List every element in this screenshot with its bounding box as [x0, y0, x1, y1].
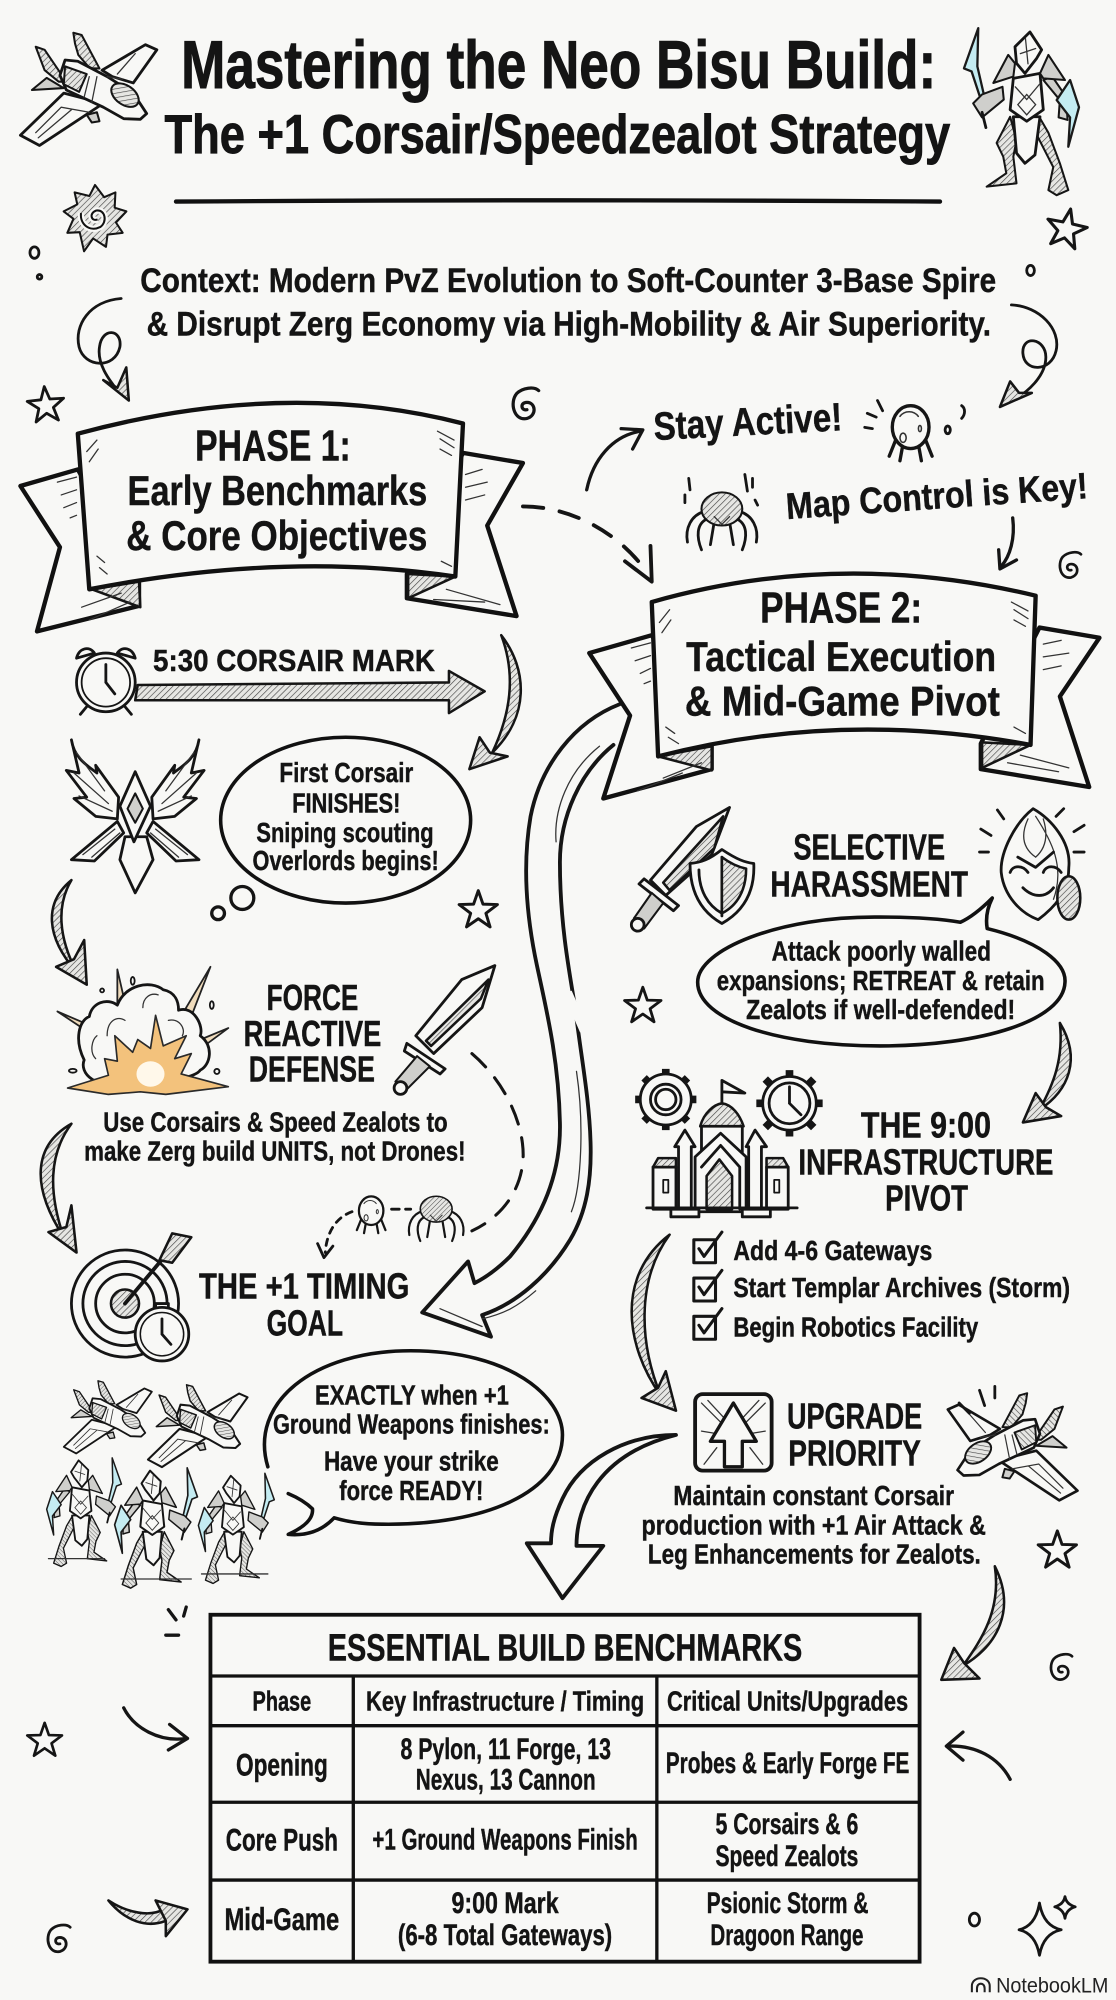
panel: phase 2 banner: PHASE 2: [760, 584, 922, 632]
table: essential build benchmarks: Key Infrastructure / Timing [366, 1685, 644, 1716]
icons: small zerg bugs [357, 1196, 463, 1241]
label: selective harassment [770, 828, 968, 905]
label: +1 timing goal: GOAL [267, 1303, 343, 1343]
icon: corsair emblem [66, 740, 204, 893]
icon: explosion [57, 967, 228, 1094]
curved arrow [41, 1124, 77, 1253]
panel: phase 1 banner: PHASE 1: [195, 422, 351, 470]
context text [140, 262, 996, 344]
checklist [694, 1232, 1070, 1343]
curved arrow [632, 1235, 676, 1411]
checklist: Add 4-6 Gateways [733, 1235, 932, 1266]
label: +1 timing goal: THE +1 TIMING [199, 1266, 409, 1306]
panel: phase 2 banner [589, 574, 1099, 798]
arrow to table: top left [124, 1708, 187, 1750]
dashed arrow [318, 1212, 352, 1258]
icon: alarm clock [77, 649, 135, 714]
dashed arrow between phases [523, 506, 652, 582]
icon: upgrade arrow box [695, 1394, 772, 1471]
icon: zealot top right [964, 28, 1079, 195]
panel: phase 2 banner: & Mid-Game Pivot [685, 678, 1000, 725]
speech bubble: strike force: Ground Weapons finishes: [273, 1409, 550, 1440]
icons: corsair squad [64, 1381, 248, 1467]
label: stay active: Stay Active! [652, 395, 843, 449]
label: force reactive defense: REACTIVE [244, 1014, 381, 1054]
speech bubble: strike force [264, 1351, 562, 1535]
icon: corsair right [948, 1386, 1077, 1500]
speech bubble: attack: Attack poorly walled [772, 935, 991, 966]
panel: phase 1 banner: Early Benchmarks [128, 467, 427, 514]
star [1043, 205, 1090, 250]
thought bubble [212, 737, 471, 920]
speech bubble: strike force: force READY! [339, 1475, 483, 1506]
curly arrow left [78, 299, 129, 401]
text block: upgrade [642, 1480, 986, 1570]
speech bubble: attack: Zealots if well-defended! [746, 994, 1015, 1025]
table: essential build benchmarks: Critical Units/Upgrades [667, 1685, 908, 1716]
label: force reactive defense: FORCE [267, 978, 358, 1018]
icon: castle with gears [635, 1069, 823, 1217]
table: essential build benchmarks: ESSENTIAL BUILD BENCHMARKS [328, 1627, 802, 1670]
thought bubble: FINISHES! [292, 788, 400, 819]
icon: spider [685, 475, 758, 550]
icon: target and stopwatch [71, 1233, 191, 1361]
table: essential build benchmarks: Probes & Early Forge FE [666, 1747, 909, 1780]
title: The +1 Corsair/Speedzealot Strategy [165, 103, 951, 165]
thought bubble: Sniping scouting [256, 817, 434, 848]
arrow to table: bottom left [108, 1900, 187, 1936]
icon: sword [394, 966, 495, 1094]
label: 9:00 pivot [798, 1106, 1054, 1218]
label: corsair mark: 5:30 CORSAIR MARK [153, 644, 435, 678]
table: essential build benchmarks: Mid-Game [224, 1901, 339, 1937]
big curved arrow from phase 2 to timing goal [422, 704, 620, 1337]
table: essential build benchmarks: Opening [236, 1746, 328, 1782]
arrow: striped [135, 671, 485, 713]
label: selective harassment: SELECTIVE [793, 828, 945, 868]
label: upgrade priority: UPGRADE [787, 1397, 922, 1437]
curved arrow [1023, 1023, 1071, 1122]
table: essential build benchmarks: Core Push [226, 1822, 338, 1858]
icon: zerg swirl [64, 185, 126, 251]
label: force reactive defense: DEFENSE [249, 1050, 375, 1090]
table: essential build benchmarks: (6-8 Total Gateways) [398, 1919, 612, 1952]
icon: smiling zealot [980, 809, 1084, 920]
label: selective harassment: HARASSMENT [770, 865, 968, 905]
curved arrow [469, 635, 521, 769]
title [165, 28, 951, 165]
decorative circle and sparkles [969, 1897, 1075, 1955]
table: essential build benchmarks: Phase [253, 1685, 311, 1716]
arrow to table: right [946, 1732, 1010, 1779]
table: essential build benchmarks: 5 Corsairs & 6 [716, 1808, 858, 1841]
thought bubble: Overlords begins! [253, 845, 439, 876]
text block: upgrade: Leg Enhancements for Zealots. [648, 1539, 981, 1570]
context text: & Disrupt Zerg Economy via High-Mobility & Air Superiority. [147, 306, 991, 344]
title: Mastering the Neo Bisu Build: [181, 28, 936, 103]
icon: sword and shield [631, 807, 754, 931]
curved arrow [52, 880, 87, 985]
table: essential build benchmarks: Speed Zealots [716, 1840, 858, 1873]
big arrow to table [527, 1435, 676, 1598]
notebooklm mark: NotebookLM [996, 1972, 1108, 1997]
speech bubble: strike force: Have your strike [324, 1446, 499, 1477]
panel: phase 1 banner [20, 403, 523, 631]
table: essential build benchmarks: 9:00 Mark [452, 1887, 559, 1920]
table: essential build benchmarks: +1 Ground Weapons Finish [372, 1823, 638, 1856]
text block: force reactive: Use Corsairs & Speed Zealots to [103, 1106, 448, 1137]
label: 9:00 pivot: PIVOT [885, 1178, 968, 1218]
arrow to phase 2 [999, 518, 1017, 569]
text block: upgrade: production with +1 Air Attack & [642, 1509, 986, 1540]
panel: phase 1 banner: & Core Objectives [126, 512, 427, 559]
decorative circles top [30, 247, 1034, 279]
label: upgrade priority [787, 1397, 922, 1474]
table: essential build benchmarks: Nexus, 13 Cannon [416, 1763, 596, 1796]
label: +1 timing goal [199, 1266, 409, 1343]
context text: Context: Modern PvZ Evolution to Soft-Counter 3-Base Spire [140, 262, 996, 300]
speech bubble: strike force: EXACTLY when +1 [315, 1379, 509, 1410]
arrow to stay active [587, 429, 643, 490]
icons: zealot squad [47, 1458, 274, 1588]
thought bubble: First Corsair [279, 757, 413, 788]
label: 9:00 pivot: THE 9:00 [861, 1106, 991, 1146]
table: essential build benchmarks: Dragoon Range [710, 1919, 863, 1952]
text block: upgrade: Maintain constant Corsair [673, 1480, 954, 1511]
speech bubble: attack [698, 898, 1065, 1046]
table: essential build benchmarks: Psionic Storm & [707, 1887, 869, 1920]
panel: phase 2 banner: Tactical Execution [686, 633, 996, 680]
table: essential build benchmarks [210, 1615, 920, 1962]
table: essential build benchmarks: 8 Pylon, 11 Forge, 13 [400, 1733, 611, 1766]
dashed arc [472, 1054, 523, 1231]
icon: corsair top left [20, 33, 157, 145]
curved arrow [941, 1566, 1004, 1680]
icon: overlord creature [865, 401, 965, 461]
curly arrow right [1000, 305, 1057, 407]
label: upgrade priority: PRIORITY [788, 1434, 921, 1474]
text block: force reactive [84, 1106, 466, 1167]
text block: force reactive: make Zerg build UNITS, not Drones! [84, 1136, 466, 1167]
checklist: Begin Robotics Facility [733, 1312, 979, 1343]
label: force reactive defense [244, 978, 381, 1090]
decorative ticks by table [166, 1607, 186, 1635]
